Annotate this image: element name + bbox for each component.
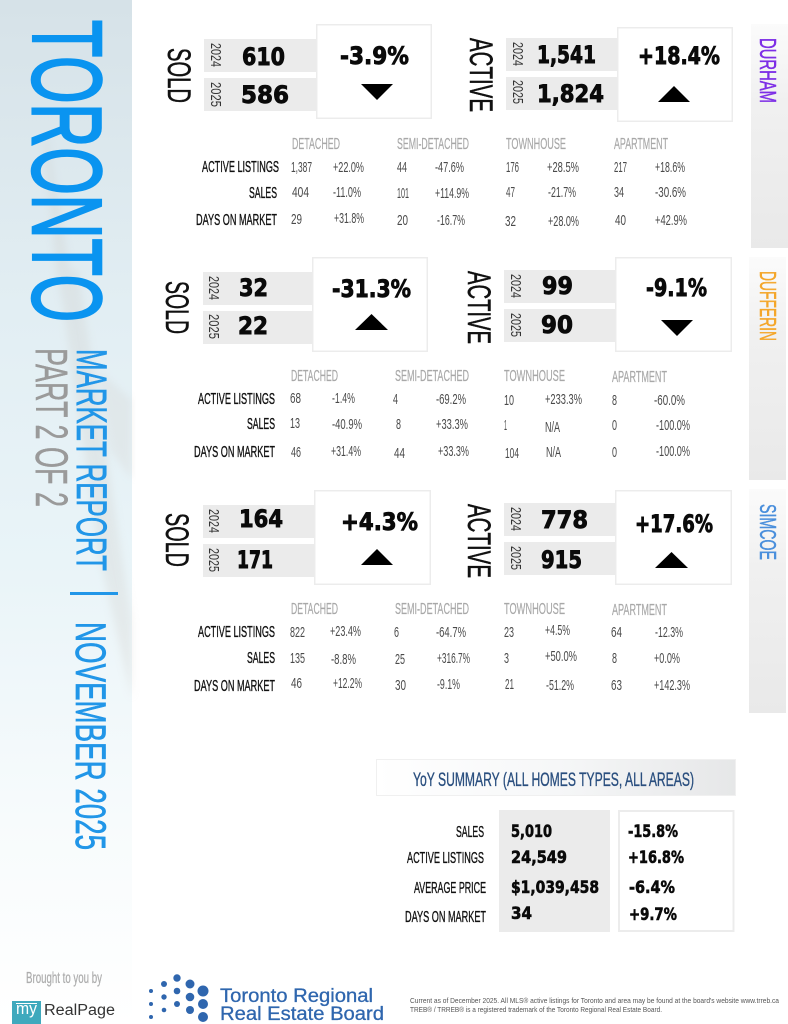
Durham property type table: +28.0% xyxy=(548,213,579,230)
Durham property type table: 20 xyxy=(397,212,408,229)
Simcoe sold comparison: SOLD xyxy=(159,513,195,567)
Durham property type table: +31.8% xyxy=(334,210,364,227)
Simcoe property type table: 6 xyxy=(394,624,399,641)
Durham property type table: 29 xyxy=(291,211,302,228)
Durham property type table: DETACHED xyxy=(292,136,340,153)
Simcoe property type table: SEMI-DETACHED xyxy=(395,601,469,618)
Simcoe active comparison: 2025 xyxy=(507,546,523,570)
Durham property type table: +18.6% xyxy=(655,159,685,176)
Durham property type table: 217 xyxy=(614,159,627,176)
Simcoe sold change callout xyxy=(315,491,430,584)
Durham sold change callout xyxy=(317,25,431,118)
Dufferin active comparison xyxy=(461,270,616,344)
Simcoe active comparison: 778 xyxy=(541,506,588,534)
Durham property type table: 44 xyxy=(397,159,407,176)
Simcoe property type table: 30 xyxy=(395,677,406,694)
Dufferin sold comparison: 2024 xyxy=(205,276,221,300)
Durham property type table: 34 xyxy=(614,184,624,201)
Dufferin property type table: 0 xyxy=(612,417,617,434)
logo wordmark xyxy=(220,986,384,1024)
summary year-over-year changes: +16.8% xyxy=(628,848,684,867)
Simcoe property type table: -8.8% xyxy=(331,651,356,668)
Dufferin sold change callout: -31.3% xyxy=(332,275,411,303)
Simcoe property type table: +0.0% xyxy=(654,650,680,667)
Durham sold comparison: 586 xyxy=(241,81,289,109)
Durham property type table: +22.0% xyxy=(333,159,364,176)
Dufferin property type table: +233.3% xyxy=(545,391,582,408)
Simcoe property type table: DETACHED xyxy=(291,601,338,618)
Durham active comparison: 1,824 xyxy=(537,80,604,108)
logo wordmark: Toronto Regional xyxy=(220,986,373,1007)
Simcoe property type table: 46 xyxy=(291,675,302,692)
Durham active comparison: 1,541 xyxy=(537,41,596,69)
Dufferin property type table: 1 xyxy=(504,417,507,434)
Dufferin property type table: 8 xyxy=(612,392,617,409)
Simcoe property type table: SALES xyxy=(247,650,275,667)
logo dots xyxy=(149,974,208,1022)
Simcoe active change callout: +17.6% xyxy=(635,510,713,538)
Dufferin property type table: -1.4% xyxy=(332,390,355,407)
Simcoe property type table: +23.4% xyxy=(330,623,361,640)
summary values: $1,039,458 xyxy=(511,878,599,897)
Dufferin property type table: SALES xyxy=(247,416,275,433)
Simcoe property type table: -9.1% xyxy=(437,676,460,693)
Simcoe property type table: -51.2% xyxy=(546,677,574,694)
footnote: TREB® / TRREB® is a registered trademark of the Toronto Regional Real Estate Board. xyxy=(410,1005,662,1014)
Simcoe active comparison: ACTIVE xyxy=(461,504,497,578)
sponsor text: Brought to you by xyxy=(26,970,102,987)
Simcoe sold comparison: 2025 xyxy=(205,548,221,572)
Simcoe property type table: +316.7% xyxy=(437,650,470,667)
Dufferin active comparison: 2025 xyxy=(507,313,523,337)
Dufferin property type table: 104 xyxy=(505,445,519,462)
Durham property type table: 47 xyxy=(506,184,515,201)
Durham property type table: ACTIVE LISTINGS xyxy=(202,159,279,176)
Durham property type table: +114.9% xyxy=(435,185,469,202)
summary row labels: SALES xyxy=(456,824,484,841)
Simcoe sold comparison: 171 xyxy=(237,546,273,574)
divider bar xyxy=(70,592,118,595)
Dufferin property type table: APARTMENT xyxy=(612,369,667,386)
Durham property type table: APARTMENT xyxy=(614,136,668,153)
Dufferin sold comparison: 22 xyxy=(238,312,268,340)
Simcoe active comparison: 2024 xyxy=(507,507,523,531)
Simcoe property type table: ACTIVE LISTINGS xyxy=(198,624,275,641)
Durham sold comparison xyxy=(161,39,316,111)
Dufferin property type table: +33.3% xyxy=(438,443,469,460)
Dufferin active change callout xyxy=(616,258,731,351)
Simcoe property type table: 21 xyxy=(505,676,514,693)
Dufferin property type table: 4 xyxy=(393,391,398,408)
Durham property type table: SALES xyxy=(249,185,277,202)
Dufferin property type table: 10 xyxy=(504,392,514,409)
Simcoe active change callout xyxy=(616,491,731,584)
Dufferin sold change callout xyxy=(313,258,427,351)
Durham property type table: -11.0% xyxy=(333,184,361,201)
Dufferin property type table: 46 xyxy=(291,444,301,461)
summary heading xyxy=(376,760,736,796)
Durham sold comparison: SOLD xyxy=(161,48,197,103)
Simcoe property type table: -64.7% xyxy=(436,624,466,641)
summary year-over-year changes: -6.4% xyxy=(629,878,675,897)
Durham active change callout: +18.4% xyxy=(638,42,720,70)
panel: Dufferin xyxy=(159,257,786,480)
Durham property type table: 176 xyxy=(506,159,519,176)
Durham property type table: -47.6% xyxy=(435,159,464,176)
Durham property type table: 101 xyxy=(397,185,409,202)
Dufferin property type table: 0 xyxy=(612,444,617,461)
Simcoe active comparison xyxy=(461,503,616,578)
Dufferin property type table: SEMI-DETACHED xyxy=(395,368,469,385)
Simcoe property type table: 63 xyxy=(611,677,622,694)
summary values: 34 xyxy=(511,904,532,923)
Dufferin property type table: 8 xyxy=(396,416,401,433)
Simcoe region tab xyxy=(749,489,786,713)
panel: Simcoe xyxy=(159,489,786,713)
Simcoe property type table: 135 xyxy=(290,650,305,667)
summary year-over-year changes xyxy=(619,811,734,931)
summary values: 5,010 xyxy=(511,822,552,841)
logo: Toronto Regional Real Estate Board xyxy=(149,974,384,1024)
Durham property type table: -16.7% xyxy=(437,212,465,229)
Dufferin property type table: 44 xyxy=(394,445,405,462)
Dufferin property type table xyxy=(194,368,690,462)
Simcoe sold comparison: 2024 xyxy=(205,509,221,533)
logo: myRealPage xyxy=(12,999,115,1024)
Dufferin property type table: -69.2% xyxy=(436,391,466,408)
Dufferin property type table: ACTIVE LISTINGS xyxy=(198,391,275,408)
Simcoe property type table: 25 xyxy=(395,651,405,668)
Simcoe sold change callout: +4.3% xyxy=(341,508,418,536)
Simcoe active comparison: 915 xyxy=(541,546,582,574)
summary row labels: ACTIVE LISTINGS xyxy=(407,850,484,867)
Dufferin active change callout: -9.1% xyxy=(646,274,707,302)
Durham property type table: 1,387 xyxy=(291,159,312,176)
Dufferin active comparison: ACTIVE xyxy=(461,271,497,344)
subtitle: market report: MARKET REPORT xyxy=(67,349,115,571)
Dufferin property type table: 13 xyxy=(290,415,300,432)
Durham property type table: DAYS ON MARKET xyxy=(196,212,277,229)
panel: YoY summary xyxy=(376,760,736,932)
Durham active comparison xyxy=(463,38,618,112)
title: Toronto: TORONTO xyxy=(12,20,122,322)
logo: myRealPage: my xyxy=(16,999,37,1018)
Simcoe property type table: 3 xyxy=(504,650,509,667)
Durham sold comparison: 2024 xyxy=(207,43,223,67)
Dufferin property type table: -100.0% xyxy=(656,443,690,460)
Dufferin region tab: DUFFERIN xyxy=(755,271,781,341)
summary year-over-year changes: -15.8% xyxy=(628,822,678,841)
footnote xyxy=(410,996,780,1014)
Dufferin property type table: N/A xyxy=(545,419,560,436)
Durham sold comparison: 610 xyxy=(242,43,285,71)
Dufferin property type table: -100.0% xyxy=(656,417,690,434)
Simcoe region tab: SIMCOE xyxy=(755,504,781,560)
Durham property type table: SEMI-DETACHED xyxy=(397,136,469,153)
logo: myRealPage: RealPage xyxy=(44,1002,115,1019)
sidebar photo background xyxy=(0,0,132,1024)
Dufferin active comparison: 99 xyxy=(542,272,573,300)
Durham property type table: 404 xyxy=(292,184,309,201)
Simcoe property type table: 23 xyxy=(504,624,514,641)
subtitle: part 2 of 2: PART 2 OF 2 xyxy=(26,348,77,507)
Dufferin property type table: +33.3% xyxy=(436,416,468,433)
Durham sold change callout: -3.9% xyxy=(340,42,409,70)
Simcoe property type table xyxy=(194,601,690,695)
Dufferin sold comparison: 32 xyxy=(239,274,268,302)
Dufferin property type table: DETACHED xyxy=(291,368,338,385)
Durham property type table: TOWNHOUSE xyxy=(506,136,566,153)
Durham property type table: +42.9% xyxy=(655,212,687,229)
panel: Durham xyxy=(161,24,788,248)
Simcoe property type table: DAYS ON MARKET xyxy=(194,678,275,695)
Durham property type table: 32 xyxy=(505,213,516,230)
Durham active change callout xyxy=(618,28,732,121)
Simcoe property type table: +142.3% xyxy=(654,677,690,694)
Dufferin property type table: DAYS ON MARKET xyxy=(194,444,275,461)
Dufferin region tab xyxy=(749,257,786,480)
Dufferin property type table: N/A xyxy=(546,444,561,461)
summary row labels xyxy=(405,824,486,926)
Durham active comparison: 2024 xyxy=(509,42,525,66)
Dufferin sold comparison: SOLD xyxy=(159,281,195,334)
Dufferin sold comparison: 2025 xyxy=(205,314,221,339)
Durham active comparison: ACTIVE xyxy=(463,38,499,112)
summary row labels: DAYS ON MARKET xyxy=(405,909,486,926)
Dufferin property type table: -60.0% xyxy=(654,392,685,409)
Simcoe property type table: 8 xyxy=(612,650,617,667)
Durham region tab: DURHAM xyxy=(755,38,781,103)
Durham sold comparison: 2025 xyxy=(207,82,223,107)
Dufferin active comparison: 90 xyxy=(541,311,573,339)
Dufferin sold comparison xyxy=(159,272,313,344)
Simcoe property type table: APARTMENT xyxy=(612,602,667,619)
Simcoe property type table: 822 xyxy=(290,624,305,641)
subtitle: november 2025: NOVEMBER 2025 xyxy=(66,622,114,850)
panel: sidebar xyxy=(0,0,132,1024)
Durham property type table: +28.5% xyxy=(547,159,579,176)
Simcoe property type table: -12.3% xyxy=(655,624,683,641)
Simcoe sold comparison xyxy=(159,505,315,577)
Dufferin property type table: -40.9% xyxy=(332,416,362,433)
Durham active comparison: 2025 xyxy=(509,80,525,104)
Durham property type table: 40 xyxy=(615,212,626,229)
summary row labels: AVERAGE PRICE xyxy=(414,880,486,897)
Simcoe sold comparison: 164 xyxy=(239,505,283,533)
Simcoe property type table: +4.5% xyxy=(545,622,570,639)
summary values: 24,549 xyxy=(511,848,567,867)
Durham region tab xyxy=(751,24,788,248)
Durham property type table: -30.6% xyxy=(655,184,686,201)
Simcoe property type table: TOWNHOUSE xyxy=(504,601,565,618)
summary values xyxy=(499,810,610,932)
Dufferin active comparison: 2024 xyxy=(507,274,523,298)
Simcoe property type table: 64 xyxy=(611,624,622,641)
summary year-over-year changes: +9.7% xyxy=(629,905,677,924)
Durham property type table: -21.7% xyxy=(548,184,576,201)
Dufferin property type table: 68 xyxy=(290,390,301,407)
Simcoe property type table: +12.2% xyxy=(333,675,362,692)
Dufferin property type table: TOWNHOUSE xyxy=(504,368,565,385)
Simcoe property type table: +50.0% xyxy=(545,648,577,665)
Durham property type table xyxy=(196,136,687,230)
Dufferin property type table: +31.4% xyxy=(331,443,361,460)
